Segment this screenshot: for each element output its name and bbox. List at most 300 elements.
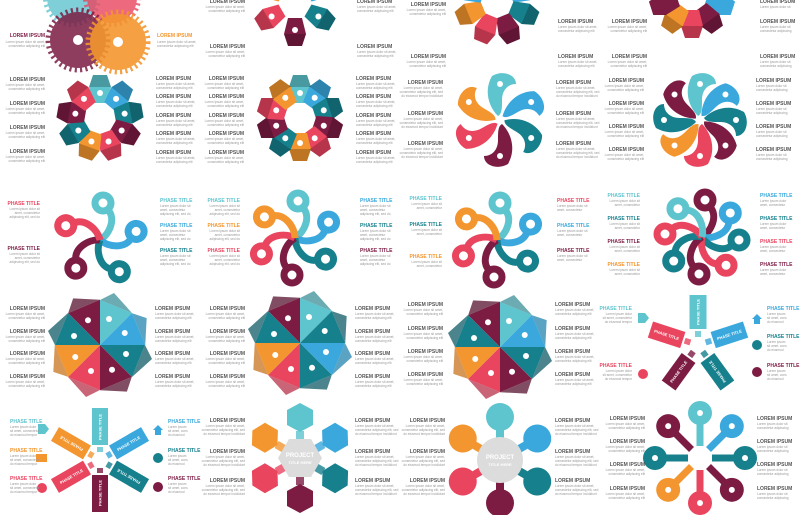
text blocks: LOREM IPSUM <box>408 111 443 117</box>
text blocks: do eiusmod tempor incididunt <box>403 463 445 467</box>
text blocks: consectetur adipiscing elit, sed <box>202 428 245 432</box>
text block right <box>157 33 196 48</box>
text blocks: LOREM IPSUM <box>10 125 45 131</box>
text blocks: PHASE TITLE <box>607 216 641 222</box>
text blocks <box>409 196 590 268</box>
text blocks: consectetur adipiscing elit <box>356 141 393 145</box>
text blocks: Lorem ipsum dolor sit <box>412 260 442 264</box>
text blocks: consectetur adipiscing elit <box>555 312 592 316</box>
text blocks: LOREM IPSUM <box>210 306 245 312</box>
text blocks: Lorem ipsum dolor sit <box>412 228 442 232</box>
text blocks: Lorem ipsum dolor sit amet, <box>555 484 594 488</box>
text blocks: adipiscing elit, sed do <box>210 212 240 216</box>
text blocks: amet, consectetur <box>417 206 443 210</box>
text blocks <box>608 0 795 68</box>
text blocks: do eiusmod tempor incididunt <box>203 432 245 436</box>
text blocks: Lorem ipsum dolor sit <box>757 492 788 496</box>
text blocks: Lorem ipsum dolor sit amet, <box>357 50 396 54</box>
text blocks: LOREM IPSUM <box>555 349 590 355</box>
text block left: consectetur adipiscing elit <box>8 44 45 48</box>
text blocks: amet, consectetur <box>15 256 41 260</box>
panel: row3 cell3 swirl 6 <box>409 192 590 288</box>
text blocks <box>607 193 793 276</box>
text blocks: do eiusmod tempor incididunt <box>555 492 597 496</box>
text blocks: consectetur adipiscing elit <box>156 123 193 127</box>
text blocks: Lorem ipsum dolor sit amet, <box>608 60 647 64</box>
text blocks: consectetur adipiscing elit <box>355 316 392 320</box>
text blocks: Lorem ipsum dolor sit amet, <box>605 84 644 88</box>
text blocks: consectetur adipiscing <box>757 472 789 476</box>
text blocks: adipiscing elit, sed do <box>360 212 391 216</box>
diagram: rays: PHASE TITLE <box>708 359 727 384</box>
text blocks: do eiusmod tempor <box>605 377 633 381</box>
text blocks: Lorem ipsum dolor sit amet, <box>205 100 244 104</box>
text blocks: Lorem ipsum dolor sit <box>757 468 788 472</box>
text blocks: Lorem ipsum dolor sit amet, <box>206 5 245 9</box>
text blocks: consectetur adipiscing elit <box>355 339 392 343</box>
text blocks: amet, consectetur <box>417 232 443 236</box>
text blocks: LOREM IPSUM <box>155 351 190 357</box>
text blocks: adipiscing elit, sed do <box>160 262 191 266</box>
text blocks: PHASE TITLE <box>160 223 193 229</box>
text blocks: Lorem ipsum dolor sit amet, <box>407 8 446 12</box>
text blocks <box>207 198 393 266</box>
text blocks <box>10 419 201 494</box>
text blocks: consectetur adipiscing elit, sed <box>202 488 245 492</box>
text blocks: consectetur adipiscing elit <box>155 384 192 388</box>
text blocks: consectetur adipiscing elit <box>156 104 193 108</box>
text blocks: LOREM IPSUM <box>556 80 591 86</box>
text blocks: LOREM IPSUM <box>209 131 244 137</box>
diagram: bulb ring <box>643 401 757 515</box>
text blocks: Lorem ipsum dolor sit amet, <box>355 484 394 488</box>
text blocks: consectetur adipiscing elit <box>8 111 45 115</box>
text blocks: LOREM IPSUM <box>357 44 392 50</box>
text blocks: Lorem ipsum dolor <box>10 482 37 486</box>
text blocks: LOREM IPSUM <box>155 329 190 335</box>
text blocks: LOREM IPSUM <box>609 147 644 153</box>
text blocks: consectetur adipiscing elit, sed <box>400 151 443 155</box>
text blocks: PHASE TITLE <box>767 306 800 312</box>
diagram: hexagon hub: PROJECT <box>286 453 315 459</box>
diagram: circle hub <box>444 403 556 515</box>
text blocks: consectetur adipiscing elit <box>356 104 393 108</box>
text blocks: consectetur adipiscing <box>756 157 788 161</box>
text blocks: LOREM IPSUM <box>555 478 590 484</box>
text blocks: Lorem ipsum dolor sit <box>10 252 40 256</box>
text blocks: Lorem ipsum dolor sit amet, <box>205 137 244 141</box>
text blocks: PHASE TITLE <box>607 239 641 245</box>
text blocks: LOREM IPSUM <box>410 449 445 455</box>
text blocks: consectetur adipiscing <box>757 449 789 453</box>
panel: row4 cell1 origami <box>6 286 194 404</box>
text blocks: consectetur adipiscing elit, sed <box>556 90 600 94</box>
icons <box>36 424 163 493</box>
text blocks: LOREM IPSUM <box>555 302 590 308</box>
diagram: origami pinwheel <box>41 286 159 404</box>
text blocks: consectetur adipiscing elit <box>406 312 443 316</box>
text blocks: Lorem ipsum dolor sit <box>760 60 791 64</box>
text blocks: PHASE TITLE <box>168 419 201 425</box>
text blocks: LOREM IPSUM <box>210 44 245 50</box>
text blocks: PHASE TITLE <box>760 193 793 199</box>
text blocks: LOREM IPSUM <box>612 54 647 60</box>
text blocks: Lorem ipsum dolor sit amet, <box>558 60 597 64</box>
text blocks: Lorem ipsum dolor sit <box>610 222 640 226</box>
text block left <box>6 33 45 48</box>
text blocks: consectetur adipiscing elit <box>555 336 592 340</box>
text blocks: do eiusmod <box>168 462 185 466</box>
text blocks: consectetur adipiscing <box>760 29 792 33</box>
text blocks: LOREM IPSUM <box>757 416 792 422</box>
panel: row1 cell4 petals <box>608 0 795 68</box>
diagram: splash blobs <box>47 0 146 70</box>
text blocks: amet, consectetur <box>557 258 583 262</box>
text blocks: consectetur adipiscing elit <box>8 159 45 163</box>
text blocks: Lorem ipsum <box>767 340 786 344</box>
text blocks: Lorem ipsum dolor sit amet, <box>555 378 594 382</box>
text blocks: Lorem ipsum <box>168 482 187 486</box>
text blocks: LOREM IPSUM <box>210 351 245 357</box>
text blocks: sit amet, consectetur <box>603 316 633 320</box>
text blocks: LOREM IPSUM <box>210 418 245 424</box>
panel: row5 cell2 hexagons <box>202 403 399 513</box>
text blocks: Lorem ipsum dolor sit <box>210 229 240 233</box>
text blocks: Lorem ipsum dolor sit <box>10 207 40 211</box>
diagram: swirl blades <box>653 73 747 167</box>
text blocks: Lorem ipsum dolor sit <box>610 245 640 249</box>
text blocks: amet, consectetur <box>417 264 443 268</box>
text blocks: LOREM IPSUM <box>156 150 191 156</box>
text blocks: amet, consectetur <box>760 226 786 230</box>
text blocks: consectetur adipiscing elit <box>608 88 644 92</box>
text blocks: Lorem ipsum dolor sit <box>412 202 442 206</box>
diagram: rays: PHASE TITLE <box>98 414 102 440</box>
panel: row4 cell2 origami <box>206 284 394 402</box>
panel: row2 cell3 blades 6 <box>400 73 600 167</box>
diagram: rays: PHASE TITLE <box>59 468 84 485</box>
text blocks: consectetur adipiscing elit, sed <box>555 488 599 492</box>
diagram: rays <box>51 408 149 512</box>
text blocks: LOREM IPSUM <box>355 418 390 424</box>
text blocks <box>404 302 594 386</box>
text blocks: consectetur adipiscing elit <box>356 86 393 90</box>
text blocks: adipiscing elit, sed do <box>160 212 191 216</box>
text blocks: Lorem ipsum dolor sit amet, <box>6 131 45 135</box>
text blocks: Lorem ipsum dolor sit <box>557 229 588 233</box>
text blocks: LOREM IPSUM <box>156 76 191 82</box>
text blocks: PHASE TITLE <box>10 419 43 425</box>
text blocks: LOREM IPSUM <box>210 478 245 484</box>
text blocks: Lorem ipsum dolor sit <box>160 254 191 258</box>
text blocks: Lorem ipsum dolor sit amet, <box>404 308 443 312</box>
text blocks: Lorem ipsum dolor sit amet, <box>155 335 194 339</box>
text blocks: amet, consectetur <box>160 233 186 237</box>
diagram: petal ring <box>256 75 344 161</box>
text blocks: amet, consectetur <box>615 203 641 207</box>
text blocks: adipiscing elit, sed do <box>210 237 240 241</box>
text blocks: Lorem ipsum dolor sit <box>360 229 391 233</box>
text blocks: PHASE TITLE <box>409 196 443 202</box>
text blocks: LOREM IPSUM <box>556 111 591 117</box>
text blocks: consectetur adipiscing elit <box>608 449 645 453</box>
text blocks: Lorem ipsum dolor sit amet, <box>6 107 45 111</box>
text blocks: consectetur adipiscing elit <box>555 359 592 363</box>
text blocks: LOREM IPSUM <box>155 306 190 312</box>
text blocks: consectetur adipiscing elit <box>406 382 443 386</box>
text blocks: PHASE TITLE <box>760 216 793 222</box>
text blocks: Lorem ipsum dolor sit amet, <box>605 107 644 111</box>
diagram: hexagon hub: TITLE HERE <box>288 460 312 465</box>
text blocks: consectetur adipiscing elit <box>8 135 45 139</box>
text blocks: Lorem ipsum dolor sit amet, <box>606 422 645 426</box>
text blocks: Lorem ipsum dolor sit amet, <box>156 156 195 160</box>
text blocks: LOREM IPSUM <box>609 124 644 130</box>
text blocks: amet, consectetur <box>215 258 241 262</box>
text blocks <box>202 418 399 496</box>
text blocks: LOREM IPSUM <box>355 351 390 357</box>
text blocks: consectetur adipiscing elit <box>8 339 45 343</box>
diagram: swirl arms <box>52 192 150 287</box>
panel: row4 cell3 origami <box>404 288 594 406</box>
text blocks: Lorem ipsum dolor sit amet, <box>355 335 394 339</box>
text blocks: Lorem ipsum dolor sit <box>610 268 640 272</box>
text blocks: Lorem ipsum dolor sit amet, <box>355 380 394 384</box>
text blocks: Lorem ipsum dolor sit amet, <box>356 137 395 141</box>
text blocks: Lorem ipsum dolor sit <box>760 5 791 9</box>
text blocks: Lorem ipsum dolor sit <box>610 199 640 203</box>
text blocks: amet, consectetur <box>615 226 641 230</box>
text blocks: LOREM IPSUM <box>209 94 244 100</box>
panel: row2 cell2 petal ring 10 <box>205 75 395 164</box>
text blocks: LOREM IPSUM <box>757 462 792 468</box>
text blocks: Lorem ipsum <box>767 312 786 316</box>
text blocks: consectetur adipiscing elit, sed <box>355 488 399 492</box>
text blocks: LOREM IPSUM <box>155 374 190 380</box>
text blocks: consectetur adipiscing elit <box>8 361 45 365</box>
diagram: swirl blades <box>451 73 549 167</box>
diagram: origami pinwheel <box>441 288 559 406</box>
text blocks: do eiusmod tempor incididunt <box>556 94 598 98</box>
text blocks: consectetur adipiscing elit <box>357 9 394 13</box>
text blocks: LOREM IPSUM <box>210 329 245 335</box>
text blocks: LOREM IPSUM <box>610 439 645 445</box>
text blocks: PHASE TITLE <box>360 198 393 204</box>
diagram: rays: PHASE TITLE <box>98 480 102 506</box>
panel: row5 cell4 bulbs <box>606 401 792 515</box>
text blocks: do eiusmod <box>767 348 784 352</box>
text blocks: LOREM IPSUM <box>408 349 443 355</box>
text blocks: consectetur adipiscing elit <box>155 339 192 343</box>
text blocks: Lorem ipsum dolor sit amet, <box>406 455 445 459</box>
text blocks: amet, consectetur <box>360 258 386 262</box>
text blocks: consectetur adipiscing elit <box>208 9 245 13</box>
text blocks: adipiscing elit, sed do <box>160 237 191 241</box>
text blocks: PHASE TITLE <box>7 201 41 207</box>
text blocks: LOREM IPSUM <box>408 141 443 147</box>
text blocks: Lorem ipsum dolor sit amet, <box>555 424 594 428</box>
text blocks: LOREM IPSUM <box>355 449 390 455</box>
text blocks: consectetur adipiscing elit, sed <box>400 121 443 125</box>
text blocks: sit amet, cons <box>168 486 188 490</box>
text blocks: PHASE TITLE <box>160 248 193 254</box>
text blocks <box>599 306 800 381</box>
text blocks: LOREM IPSUM <box>757 486 792 492</box>
diagram: rays: PHASE TITLE <box>116 468 141 485</box>
text blocks: Lorem ipsum dolor sit amet, <box>356 82 395 86</box>
text blocks: consectetur adipiscing elit <box>357 54 394 58</box>
text blocks: PHASE TITLE <box>207 198 241 204</box>
text blocks: Lorem ipsum dolor sit amet, <box>156 119 195 123</box>
text blocks: Lorem ipsum dolor <box>760 268 787 272</box>
text blocks: consectetur adipiscing <box>760 64 792 68</box>
text blocks: consectetur adipiscing elit <box>155 316 192 320</box>
text blocks: Lorem ipsum dolor <box>760 222 787 226</box>
text block left: LOREM IPSUM <box>10 33 45 39</box>
panel: row3 cell4 swirl 8 <box>607 189 793 285</box>
text blocks: Lorem ipsum dolor sit amet, <box>355 312 394 316</box>
text blocks: Lorem ipsum dolor sit amet, <box>404 332 443 336</box>
text blocks: Lorem ipsum dolor sit <box>756 153 787 157</box>
text blocks: LOREM IPSUM <box>411 2 446 8</box>
text blocks: LOREM IPSUM <box>356 76 391 82</box>
text blocks: Lorem ipsum dolor sit <box>757 422 788 426</box>
text blocks: Lorem ipsum dolor sit amet, <box>404 355 443 359</box>
text blocks: consectetur adipiscing elit <box>610 64 647 68</box>
text blocks: Lorem ipsum dolor sit amet, <box>6 83 45 87</box>
text blocks: Lorem ipsum dolor sit amet, <box>404 86 443 90</box>
text blocks: LOREM IPSUM <box>156 113 191 119</box>
text blocks: amet, consectetur <box>760 272 786 276</box>
text blocks: consectetur adipiscing elit <box>156 141 193 145</box>
text blocks: consectetur adipiscing elit <box>208 339 245 343</box>
text blocks: do eiusmod tempor incididunt <box>355 463 397 467</box>
panel: row1 cell2 petals <box>206 0 396 58</box>
text blocks: consectetur adipiscing elit, sed <box>400 90 443 94</box>
text blocks: LOREM IPSUM <box>156 94 191 100</box>
text blocks: consectetur adipiscing <box>757 496 789 500</box>
text blocks: PHASE TITLE <box>599 363 633 369</box>
text blocks: PHASE TITLE <box>409 222 443 228</box>
text blocks: amet, consectetur <box>360 233 386 237</box>
text blocks: LOREM IPSUM <box>410 478 445 484</box>
diagram: swirl arms <box>654 189 750 285</box>
text blocks: amet, consectetur <box>557 208 583 212</box>
text blocks: consectetur adipiscing elit, sed <box>556 121 600 125</box>
text blocks: sit amet, cons <box>168 458 188 462</box>
text blocks: LOREM IPSUM <box>610 486 645 492</box>
text blocks: LOREM IPSUM <box>408 302 443 308</box>
text blocks: LOREM IPSUM <box>209 76 244 82</box>
text blocks: do eiusmod tempor <box>10 490 38 494</box>
text blocks: consectetur adipiscing elit <box>355 361 392 365</box>
text blocks: Lorem ipsum dolor sit amet, <box>556 147 595 151</box>
text blocks: Lorem ipsum dolor sit amet, <box>156 82 195 86</box>
text blocks: LOREM IPSUM <box>756 78 791 84</box>
text blocks: do eiusmod tempor incididunt <box>203 492 245 496</box>
text blocks: do eiusmod tempor incididunt <box>355 432 397 436</box>
text blocks: Lorem ipsum <box>168 425 187 429</box>
text blocks: consectetur adipiscing <box>756 134 788 138</box>
text blocks: consectetur adipiscing elit, sed <box>555 428 599 432</box>
text blocks: consectetur adipiscing elit <box>8 384 45 388</box>
text blocks: Lorem ipsum dolor sit amet, <box>556 117 595 121</box>
text blocks: Lorem ipsum dolor sit <box>760 25 791 29</box>
text blocks: consectetur adipiscing elit, sed <box>355 459 399 463</box>
text blocks: PHASE TITLE <box>168 448 201 454</box>
text blocks: sit amet, cons <box>767 373 787 377</box>
text blocks: consectetur adipiscing elit <box>608 426 645 430</box>
text blocks: do eiusmod tempor <box>10 433 38 437</box>
text blocks: LOREM IPSUM <box>356 94 391 100</box>
text blocks: do eiusmod tempor incididunt <box>203 463 245 467</box>
text blocks: amet, consectetur <box>160 208 186 212</box>
text blocks: LOREM IPSUM <box>355 329 390 335</box>
text blocks: Lorem ipsum dolor sit <box>756 130 787 134</box>
text blocks: LOREM IPSUM <box>355 478 390 484</box>
text blocks: consectetur adipiscing elit <box>208 160 244 164</box>
text blocks: LOREM IPSUM <box>411 54 446 60</box>
text blocks: Lorem ipsum dolor sit amet, <box>205 119 244 123</box>
text blocks: PHASE TITLE <box>7 246 41 252</box>
diagram: rays: PHASE TITLE <box>716 328 743 341</box>
text blocks: consectetur adipiscing elit <box>155 361 192 365</box>
panel: row4 cell4 rays 5 <box>599 295 800 390</box>
text blocks: consectetur adipiscing elit <box>356 123 393 127</box>
text blocks: Lorem ipsum dolor <box>10 454 37 458</box>
text blocks: Lorem ipsum dolor sit amet, <box>555 332 594 336</box>
text blocks: PHASE TITLE <box>599 306 633 312</box>
text blocks: consectetur adipiscing <box>756 88 788 92</box>
text blocks: do eiusmod tempor <box>10 462 38 466</box>
text blocks: PHASE TITLE <box>160 198 193 204</box>
text blocks: LOREM IPSUM <box>756 147 791 153</box>
text blocks: LOREM IPSUM <box>555 326 590 332</box>
text blocks: amet, consectetur <box>760 249 786 253</box>
text blocks <box>605 78 791 161</box>
text blocks: adipiscing elit, sed do <box>360 237 391 241</box>
text blocks: Lorem ipsum dolor sit amet, <box>406 484 445 488</box>
text blocks: Lorem ipsum dolor sit <box>757 445 788 449</box>
panel: row1 cell3 petals <box>407 0 597 68</box>
panel: row1 cell1 splash <box>6 0 196 70</box>
text blocks: PHASE TITLE <box>607 262 641 268</box>
text blocks: Lorem ipsum dolor sit amet, <box>558 25 597 29</box>
text blocks: LOREM IPSUM <box>555 372 590 378</box>
text blocks: LOREM IPSUM <box>756 124 791 130</box>
text blocks: consectetur adipiscing elit <box>8 316 45 320</box>
text blocks: do eiusmod tempor incididunt <box>401 155 443 159</box>
text blocks: do eiusmod tempor incididunt <box>355 492 397 496</box>
text blocks: amet, consectetur <box>215 208 241 212</box>
text blocks: LOREM IPSUM <box>10 101 45 107</box>
panel: row2 cell4 blades 8 <box>605 73 791 167</box>
text blocks <box>7 198 193 266</box>
text blocks: sit amet, cons <box>767 316 787 320</box>
text blocks: sit amet, consectetur <box>10 458 40 462</box>
panel: row3 cell1 swirl 5 <box>7 192 193 287</box>
text blocks: LOREM IPSUM <box>156 131 191 137</box>
diagram: rays: PHASE TITLE <box>116 435 141 452</box>
text blocks: LOREM IPSUM <box>10 351 45 357</box>
text blocks: Lorem ipsum dolor <box>760 245 787 249</box>
text blocks: Lorem ipsum dolor sit amet, <box>406 424 445 428</box>
text blocks: Lorem ipsum dolor sit <box>557 254 588 258</box>
text blocks: LOREM IPSUM <box>757 439 792 445</box>
text blocks: do eiusmod tempor incididunt <box>401 94 443 98</box>
text blocks: Lorem ipsum dolor sit <box>360 204 391 208</box>
text blocks: Lorem ipsum dolor sit amet, <box>606 468 645 472</box>
